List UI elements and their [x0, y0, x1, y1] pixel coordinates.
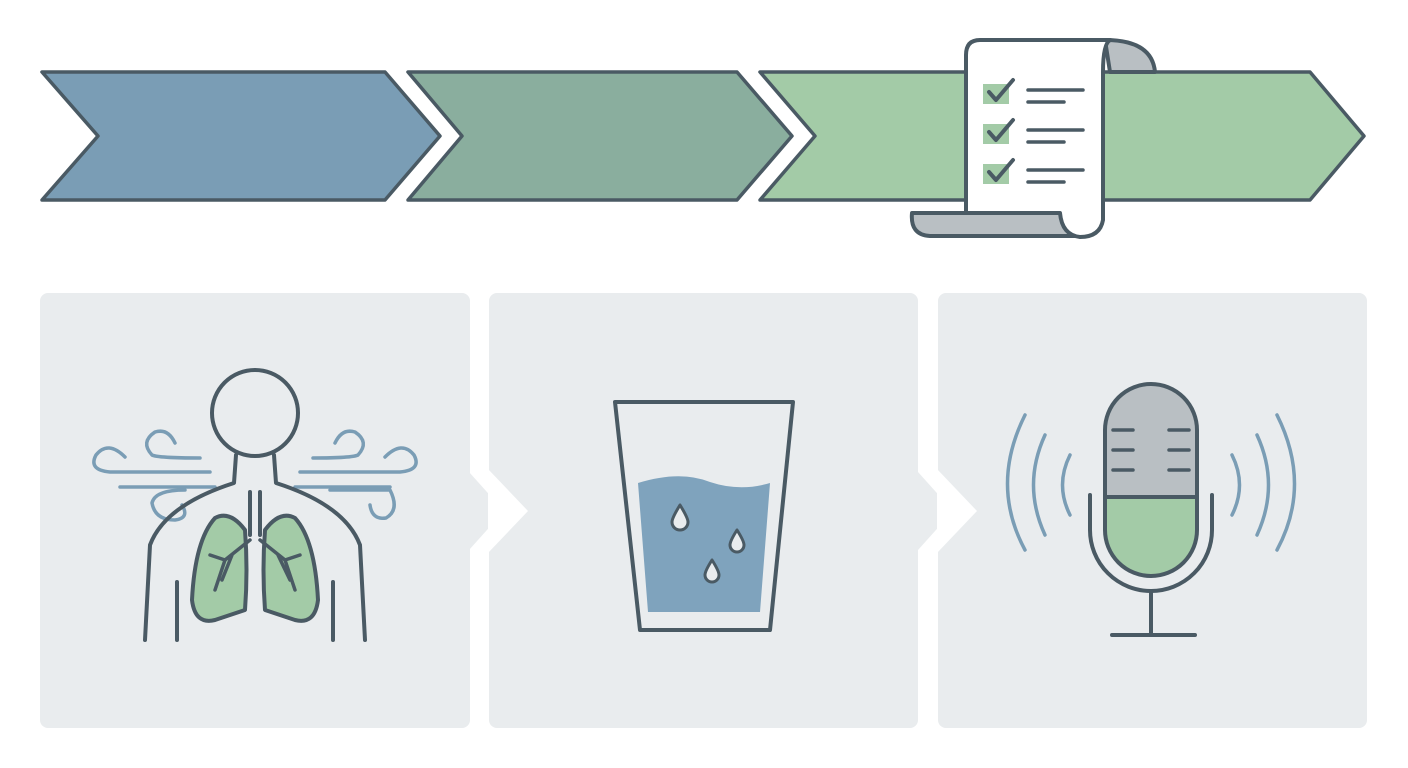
chevron: step 1 — [42, 72, 440, 200]
panel: hydration — [488, 293, 953, 728]
panel: voice — [937, 293, 1367, 728]
panel: breathing — [40, 293, 504, 728]
icon: glass of water — [615, 402, 793, 630]
icon: microphone — [1008, 384, 1294, 635]
icon: body with lungs — [94, 370, 416, 640]
chevron: step 2 — [408, 72, 792, 200]
chevron: step 3 — [760, 72, 1364, 200]
icon: checklist scroll — [912, 40, 1155, 237]
